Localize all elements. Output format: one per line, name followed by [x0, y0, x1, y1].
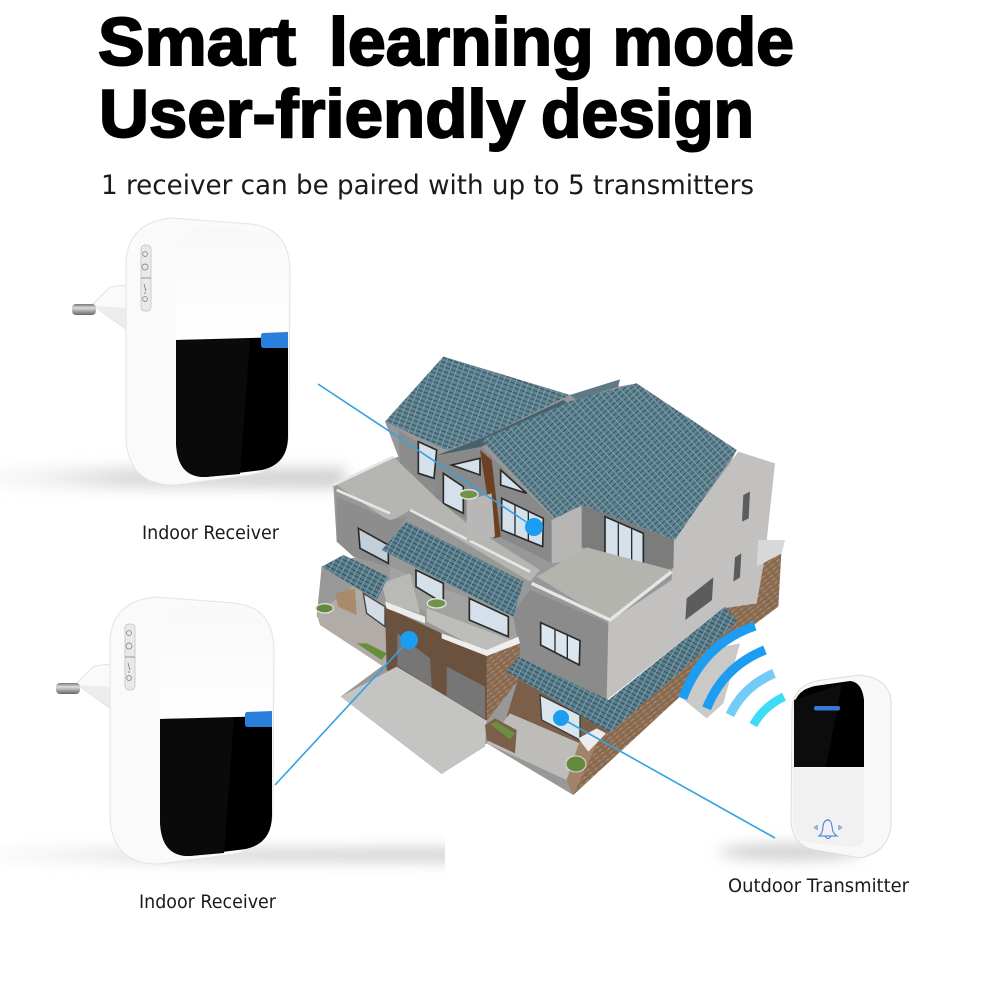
signal arcs: [683, 626, 784, 725]
left roof: [385, 357, 570, 450]
left awning: [322, 555, 388, 600]
plug: [56, 664, 111, 709]
title: [98, 4, 794, 152]
blue bar: [814, 706, 840, 710]
title: User-friendly: [99, 76, 525, 152]
label: lower receiver: Indoor Receiver: [139, 891, 276, 913]
blue indicator: [245, 711, 272, 727]
receiver face: [176, 226, 288, 340]
connector: lower receiver: [275, 631, 418, 785]
black panel: [160, 716, 272, 856]
title: learning mode: [329, 4, 794, 80]
side buttons: [141, 245, 151, 311]
transmitter face: [793, 768, 864, 847]
timber column: [480, 450, 501, 538]
transmitter body: [791, 675, 891, 858]
label: transmitter: Outdoor Transmitter: [728, 875, 909, 897]
black panel: [176, 337, 288, 477]
terrace left: [337, 457, 540, 582]
left wall: [337, 497, 407, 567]
blue indicator: [261, 332, 288, 348]
device: lower indoor receiver: [56, 597, 274, 864]
terrace right: [537, 547, 672, 622]
title: Smart: [98, 4, 296, 80]
left terrace: [317, 587, 390, 667]
upper windows: [418, 442, 643, 570]
mid wall: [390, 567, 518, 643]
garage doors: [397, 633, 485, 718]
receiver body: [126, 218, 290, 485]
title: design: [541, 76, 754, 152]
label: upper receiver: Indoor Receiver: [142, 522, 279, 544]
subtitle: 1 receiver can be paired with up to 5 transmitters: [101, 170, 754, 201]
lower ground: [507, 678, 610, 760]
driveway: [341, 667, 487, 774]
house base silhouette: [317, 357, 737, 795]
side wall: [607, 452, 775, 700]
receiver body: [110, 597, 274, 864]
connector: transmitter: [553, 710, 775, 838]
lower right terrace: [680, 643, 740, 718]
black panel: [794, 681, 864, 767]
plug: [72, 285, 127, 330]
main roof: [482, 383, 737, 540]
bell icon: [815, 819, 841, 838]
stone front: [385, 607, 520, 721]
shadow: upper receiver: [0, 468, 345, 488]
side buttons: [125, 624, 135, 690]
illustration: house: [316, 357, 785, 795]
upper walls: [398, 430, 435, 507]
device: upper indoor receiver: [72, 218, 290, 485]
lower roof: [507, 607, 737, 733]
connector: upper receiver: [318, 384, 543, 536]
receiver face: [160, 605, 272, 719]
middle roof: [382, 522, 523, 617]
front wall: [510, 590, 608, 700]
device: outdoor transmitter: [791, 675, 891, 858]
stone base right: [567, 547, 782, 795]
side windows: [685, 492, 750, 620]
shadow: transmitter: [718, 844, 862, 860]
shadow: lower receiver: [0, 848, 460, 862]
